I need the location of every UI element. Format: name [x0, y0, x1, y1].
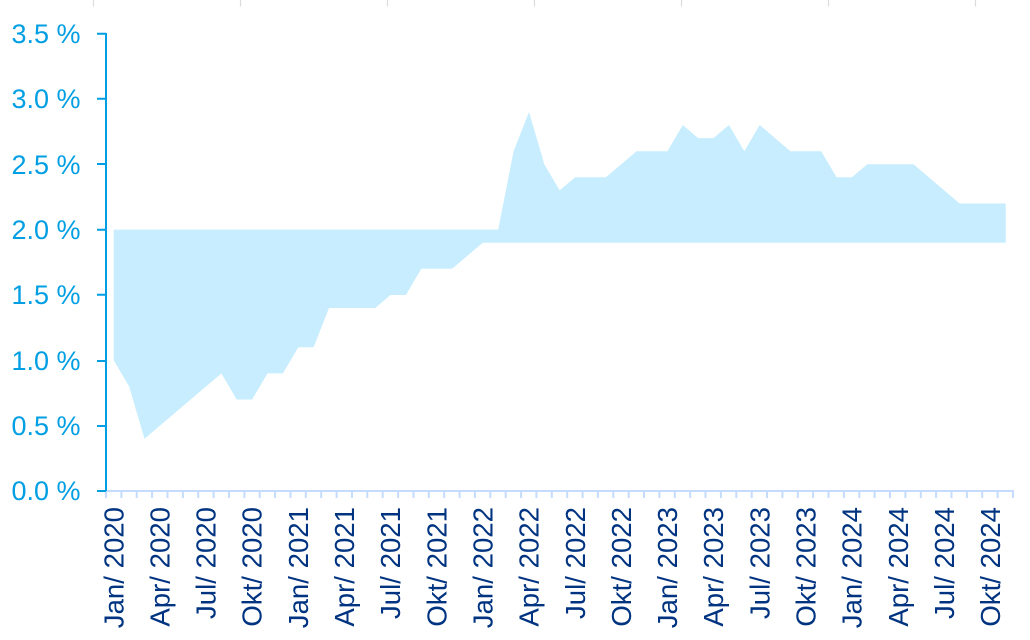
shaded area band [114, 112, 1006, 439]
y axis labels: 2.0 % [12, 215, 81, 245]
x axis date labels: Jan/ 2020 [98, 507, 129, 628]
y axis labels: 1.5 % [12, 280, 81, 310]
x axis date labels: Jul/ 2022 [560, 507, 591, 619]
y axis labels: 3.5 % [12, 19, 81, 49]
x axis date labels: Jul/ 2023 [744, 507, 775, 619]
y axis labels: 1.0 % [12, 346, 81, 376]
x axis date labels: Jan/ 2022 [468, 507, 498, 628]
x axis date labels [98, 507, 1006, 628]
y axis labels: 2.5 % [12, 150, 81, 180]
x axis date labels: Jul/ 2024 [929, 507, 960, 619]
x axis date labels: Apr/ 2021 [329, 507, 360, 627]
x axis date labels: Jan/ 2021 [283, 507, 314, 628]
x axis line and ticks [105, 491, 1014, 498]
x axis date labels: Apr/ 2024 [883, 507, 914, 627]
x axis date labels: Jan/ 2023 [652, 507, 683, 628]
y axis labels [12, 19, 81, 506]
y axis line and ticks [97, 33, 106, 491]
x axis date labels: Apr/ 2020 [144, 507, 175, 627]
x axis date labels: Okt/ 2024 [975, 507, 1006, 627]
y axis labels: 0.5 % [12, 411, 81, 441]
x axis date labels: Okt/ 2020 [237, 507, 268, 627]
top edge tick marks [94, 0, 976, 6]
y axis labels: 3.0 % [12, 84, 81, 114]
y axis labels: 0.0 % [12, 476, 81, 506]
x axis date labels: Jul/ 2021 [375, 507, 406, 619]
x axis date labels: Apr/ 2023 [698, 507, 729, 627]
x axis date labels: Okt/ 2022 [606, 507, 637, 627]
x axis date labels: Jan/ 2024 [837, 507, 868, 628]
x axis date labels: Okt/ 2023 [790, 507, 822, 627]
x axis date labels: Apr/ 2022 [514, 507, 545, 627]
x axis date labels: Jul/ 2020 [191, 507, 222, 619]
x axis date labels: Okt/ 2021 [421, 507, 452, 627]
